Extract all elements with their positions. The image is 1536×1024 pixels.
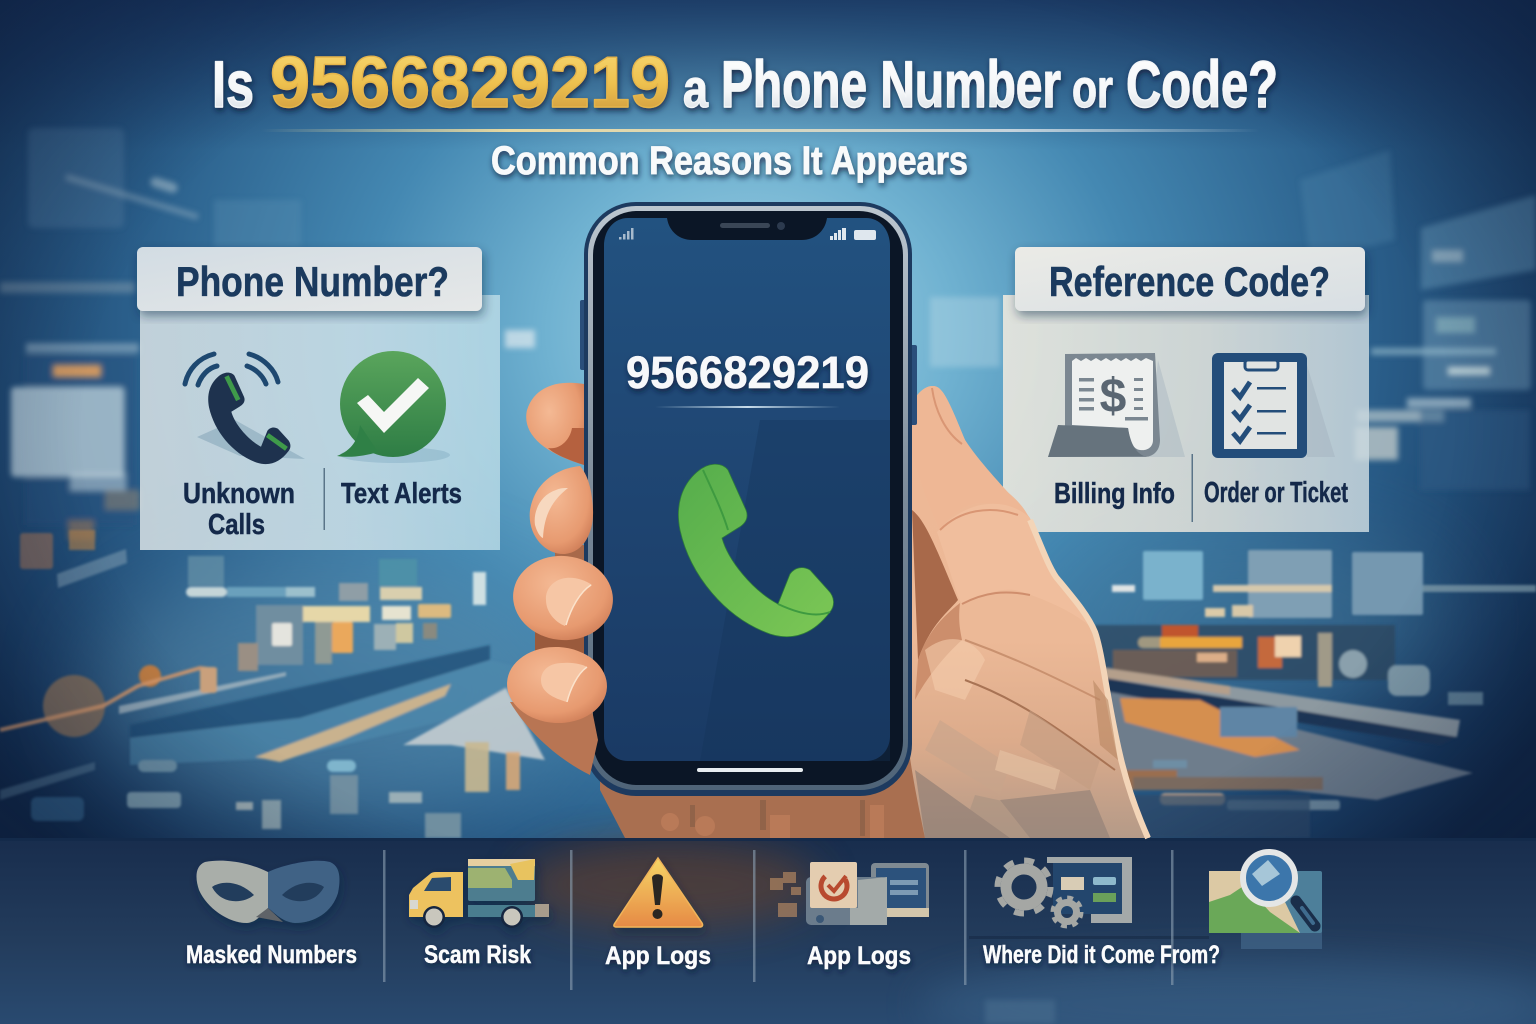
- fingers over phone: [505, 466, 617, 775]
- label: unknown calls: [183, 478, 295, 541]
- heading: reference code: Reference Code?: [1049, 258, 1330, 305]
- item: map and magnifier: [1209, 852, 1322, 949]
- item: app logs: App Logs: [807, 942, 911, 970]
- title: [212, 43, 1278, 123]
- icon: mask: [197, 861, 339, 923]
- right lower scene: [1143, 551, 1203, 600]
- title: Phone Number: [721, 47, 1061, 121]
- finger: third: [509, 551, 617, 645]
- bottom strip dividers: [383, 850, 1174, 990]
- title: or: [1072, 59, 1113, 119]
- label: unknown calls: Calls: [208, 509, 265, 541]
- title: Is: [212, 47, 254, 121]
- label: billing info: Billing Info: [1054, 478, 1175, 510]
- label: unknown calls: Unknown: [183, 478, 295, 510]
- hand: palm and thumb: [600, 386, 1150, 838]
- icon: billing receipt: $: [1100, 370, 1127, 423]
- icon: app cards: [770, 862, 929, 925]
- item: scam risk: Scam Risk: [424, 941, 531, 969]
- item: scam risk: [409, 859, 549, 969]
- icon: billing receipt: [1048, 353, 1185, 457]
- item: warning app logs: [605, 858, 711, 970]
- bottom strip background: [0, 838, 1536, 1024]
- heading: phone number: Phone Number?: [176, 258, 449, 305]
- icon: ringing handset: [185, 354, 305, 464]
- title: a: [683, 59, 709, 119]
- icon: clipboard checklist: [1212, 353, 1335, 458]
- title: Code?: [1126, 47, 1278, 121]
- icon: warning triangle: [614, 858, 703, 927]
- icon: green handset: [678, 464, 834, 637]
- item: where did it come from: [983, 857, 1220, 969]
- item: masked numbers: [186, 861, 357, 969]
- panel: phone number: [137, 247, 500, 550]
- panel: reference code: [1003, 247, 1369, 532]
- phone: [580, 202, 917, 796]
- speaker and camera: [720, 222, 785, 230]
- phone number text: 9566829219: [626, 347, 869, 398]
- top finger: [526, 383, 584, 465]
- item: where did it come from: Where Did it Come From?: [983, 941, 1220, 969]
- label: order or ticket: Order or Ticket: [1204, 477, 1348, 509]
- title: 9566829219: [270, 43, 670, 123]
- item: app logs: [770, 862, 929, 970]
- finger: fourth: [505, 644, 609, 775]
- item: warning app logs: App Logs: [605, 942, 711, 970]
- label: text alerts: Text Alerts: [341, 478, 462, 510]
- icon: green chat check: [337, 351, 450, 463]
- finger: second: [530, 466, 593, 554]
- icon: gears and panel: [998, 857, 1132, 926]
- icon: delivery truck: [409, 859, 549, 928]
- subtitle: Common Reasons It Appears: [491, 139, 968, 183]
- status icons: [619, 228, 876, 240]
- left lower scene: [57, 549, 127, 588]
- item: masked numbers: Masked Numbers: [186, 941, 357, 969]
- phone screen: [604, 218, 890, 761]
